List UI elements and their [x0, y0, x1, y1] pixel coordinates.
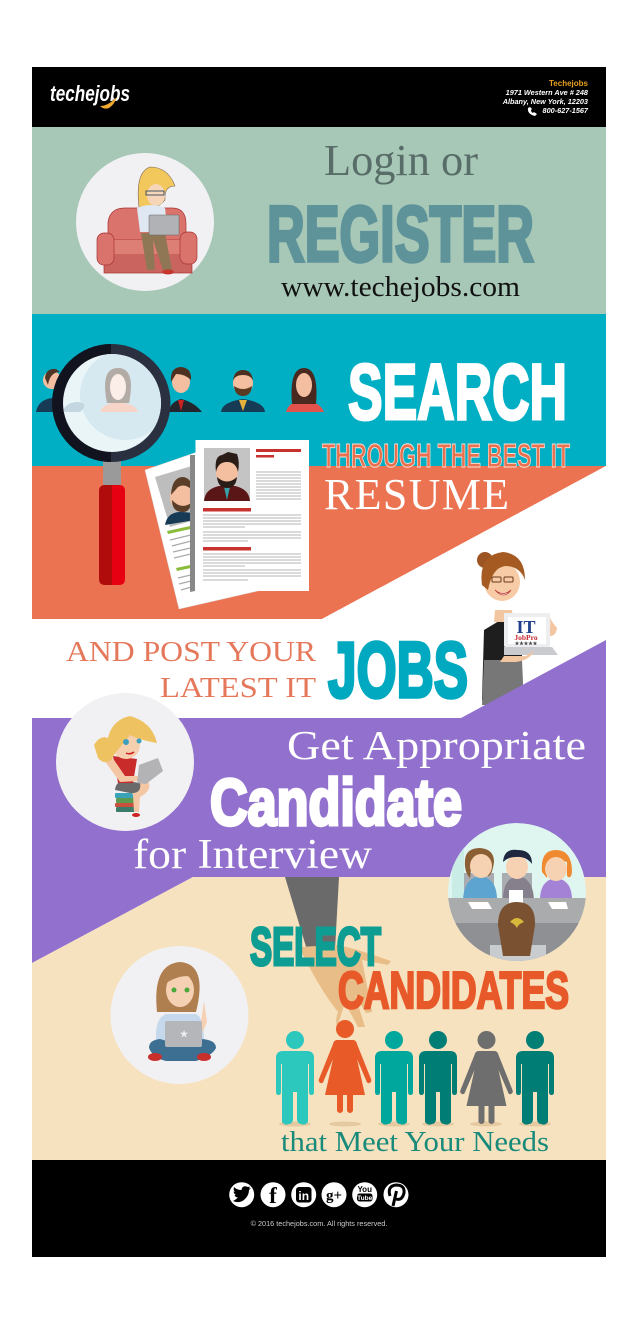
icons: candidate avatars [36, 367, 324, 412]
illustration: interview panel [448, 823, 588, 963]
contact address: Albany, New York, 12203 [502, 97, 588, 106]
illustration: woman on sofa [76, 153, 214, 291]
panel: login or register [32, 127, 606, 314]
text: that meet your needs: that Meet Your Needs [281, 1127, 549, 1158]
heading: jobs: JOBS [328, 625, 468, 714]
illustration: resumes [145, 440, 309, 609]
logo: techejobs: techejobs [50, 81, 130, 106]
panel: select background [32, 877, 606, 1160]
panel: search background [32, 314, 606, 466]
text: and post your latest it: LATEST IT [160, 672, 316, 704]
illustration: woman on books [56, 693, 194, 831]
icons: row of candidates [276, 1020, 554, 1126]
icons: social media [229, 1182, 408, 1208]
heading: select: SELECT [250, 917, 381, 977]
illustration: woman holding laptop [477, 552, 558, 705]
logo: IT JobPro [514, 617, 538, 647]
heading: resume: RESUME [324, 470, 509, 519]
heading: for interview: for Interview [133, 832, 373, 878]
copyright: © 2016 techejobs.com. All rights reserved. [251, 1219, 387, 1228]
contact address: 1971 Western Ave # 248 [506, 88, 589, 97]
contact address: 800-627-1567 [543, 106, 589, 115]
panel: resume background [32, 466, 606, 619]
logo: IT JobPro: JobPro [514, 633, 538, 642]
icons: social media: You [357, 1185, 372, 1194]
front resume [196, 440, 309, 591]
illustration: woman with laptop cross-legged: ★ [180, 1029, 189, 1039]
contact address [502, 79, 589, 116]
logo: IT JobPro: ★★★★★ [515, 641, 538, 647]
logo: IT JobPro: IT [516, 617, 536, 637]
text: and post your latest it [66, 636, 317, 704]
panel: candidate background [32, 640, 606, 963]
back resume [145, 440, 262, 609]
illustration: arm and hand picking candidate [285, 877, 391, 1027]
heading: login or: Login or [324, 136, 478, 185]
contact address: Techejobs [549, 79, 589, 88]
icons: social media: g+ [326, 1188, 342, 1204]
illustration: woman with laptop cross-legged [110, 946, 248, 1084]
url: www.techejobs.com [281, 272, 520, 303]
heading: get appropriate: Get Appropriate [287, 722, 586, 768]
icons: social media: f [269, 1183, 277, 1208]
panel: footer [32, 1160, 606, 1257]
illustration: magnifying glass [52, 344, 170, 585]
icons: social media: in [298, 1189, 309, 1203]
panel: header bar [32, 67, 606, 127]
icons: social media: Tube [357, 1195, 373, 1202]
text: and post your latest it: AND POST YOUR [66, 636, 317, 668]
heading: candidate: Candidate [210, 765, 462, 839]
panel: post jobs background [32, 466, 606, 718]
